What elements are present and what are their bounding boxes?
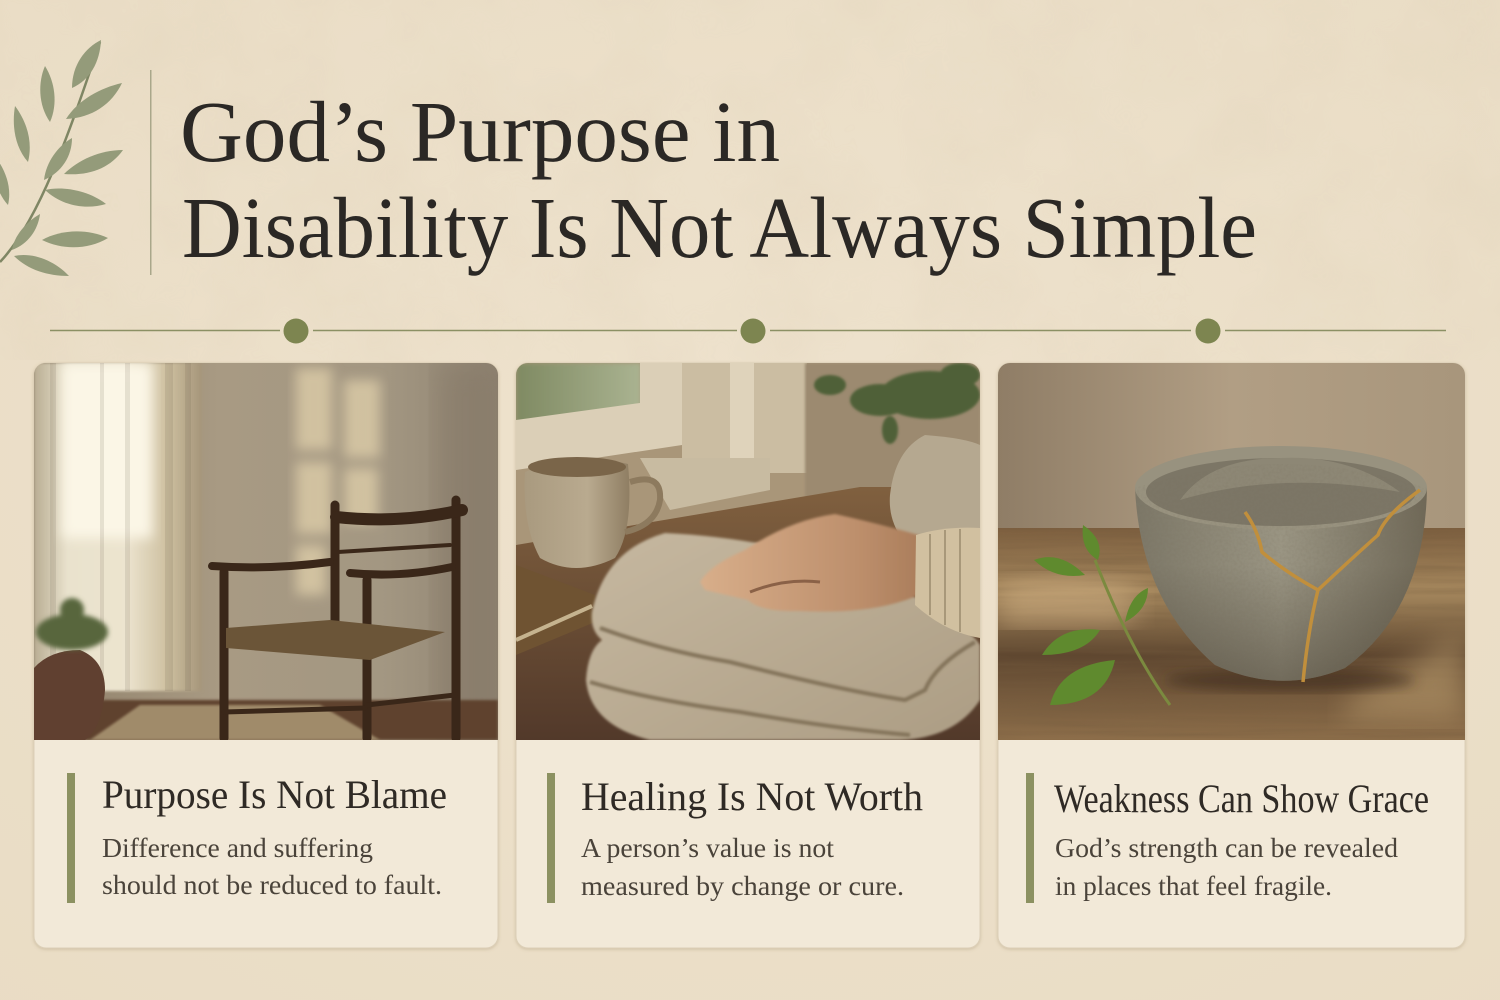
body text: God’s strength can be revealed <box>1055 833 1399 863</box>
heading: Healing Is Not Worth <box>581 774 923 819</box>
body text: should not be reduced to fault. <box>102 870 442 900</box>
body text <box>1055 833 1399 901</box>
accent bar <box>67 773 75 903</box>
body text: in places that feel fragile. <box>1055 871 1332 901</box>
icon: olive branch <box>0 40 123 276</box>
panel: Weakness Can Show Grace <box>998 363 1465 948</box>
photo: wooden chair by curtained window <box>34 363 498 740</box>
accent bar <box>1026 773 1034 903</box>
heading: Weakness Can Show Grace <box>1054 776 1429 821</box>
title: God’s Purpose in <box>180 83 780 180</box>
body text: measured by change or cure. <box>581 871 904 901</box>
title divider <box>150 70 152 275</box>
divider with three dots <box>50 318 1446 344</box>
photo: kintsugi bowl with green sprig <box>998 363 1465 740</box>
panel: Purpose Is Not Blame <box>34 363 498 948</box>
heading: Purpose Is Not Blame <box>102 772 447 817</box>
body text: Difference and suffering <box>102 833 373 863</box>
title: Disability Is Not Always Simple <box>182 179 1257 276</box>
photo: hand resting on folded cloth <box>516 363 980 740</box>
body text <box>102 833 442 900</box>
accent bar <box>547 773 555 903</box>
panel: Healing Is Not Worth <box>516 363 980 948</box>
body text <box>581 833 904 901</box>
body text: A person’s value is not <box>581 833 835 863</box>
title <box>180 83 1257 276</box>
